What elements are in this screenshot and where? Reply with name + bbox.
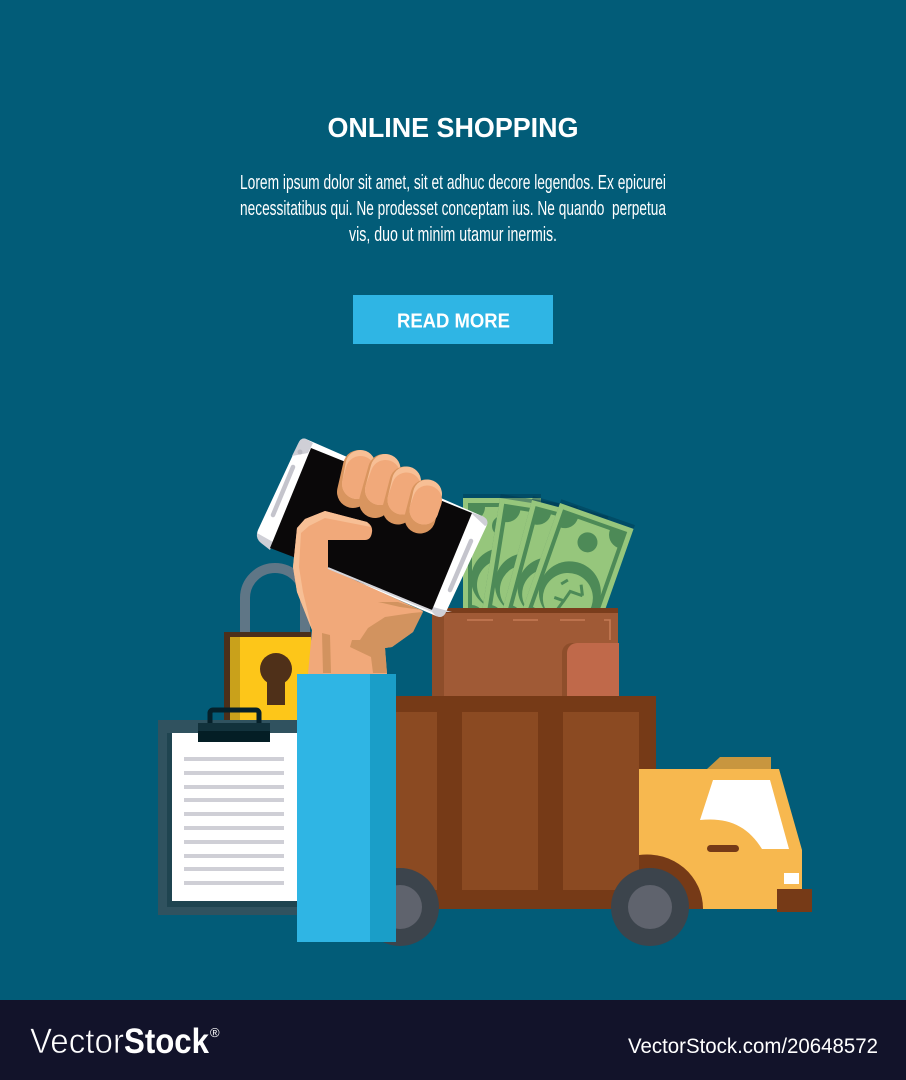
icon: padlock bbox=[224, 568, 311, 722]
palm and thumb bbox=[293, 511, 423, 674]
phone edge over palm bbox=[328, 568, 432, 611]
icon: smartphone bbox=[257, 439, 487, 617]
fingers bbox=[353, 465, 428, 518]
truck front wheel bbox=[611, 868, 689, 946]
title: ONLINE SHOPPING bbox=[328, 112, 578, 143]
icon: clipboard bbox=[158, 710, 298, 915]
logo: VectorStock: Vector bbox=[30, 1022, 124, 1061]
footer url: VectorStock.com/20648572 bbox=[628, 1035, 878, 1058]
logo: VectorStock: Stock bbox=[124, 1022, 209, 1061]
logo: VectorStock bbox=[30, 1022, 220, 1061]
sleeve bbox=[297, 674, 396, 942]
button: read more: READ MORE bbox=[397, 310, 510, 332]
logo: VectorStock: ® bbox=[210, 1025, 220, 1040]
text block: lorem ipsum description: Lorem ipsum dolor sit amet, sit et adhuc decore legendos. Ex epicurei bbox=[240, 172, 666, 194]
text block: lorem ipsum description: vis, duo ut minim utamur inermis. bbox=[349, 224, 557, 246]
icon: wallet bbox=[432, 608, 619, 696]
icon: money bills bbox=[463, 494, 635, 608]
truck cab bbox=[639, 757, 812, 912]
icon: hand bbox=[293, 465, 432, 674]
truck rear wheel bbox=[361, 868, 439, 946]
truck cargo box bbox=[380, 696, 656, 909]
text block: lorem ipsum description: necessitatibus qui. Ne prodesset conceptam ius. Ne quando perpetua bbox=[240, 198, 667, 220]
footer bar bbox=[0, 1000, 906, 1080]
button: read more bbox=[353, 295, 553, 344]
truck bbox=[361, 696, 812, 946]
text block: lorem ipsum description bbox=[240, 172, 667, 246]
